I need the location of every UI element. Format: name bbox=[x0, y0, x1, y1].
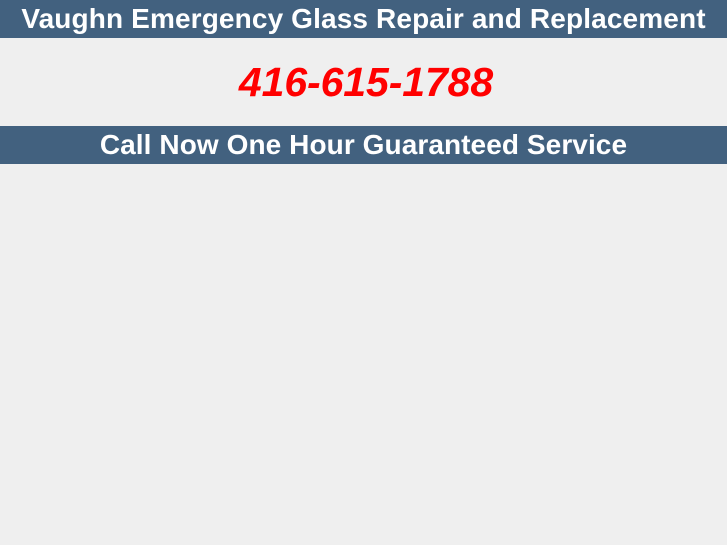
banner: call to action: Call Now One Hour Guaranteed Service bbox=[100, 129, 627, 160]
banner: call to action bbox=[0, 126, 727, 164]
phone number: 416-615-1788 bbox=[239, 59, 493, 105]
header bar: business name: Vaughn Emergency Glass Repair and Replacement bbox=[21, 3, 706, 34]
